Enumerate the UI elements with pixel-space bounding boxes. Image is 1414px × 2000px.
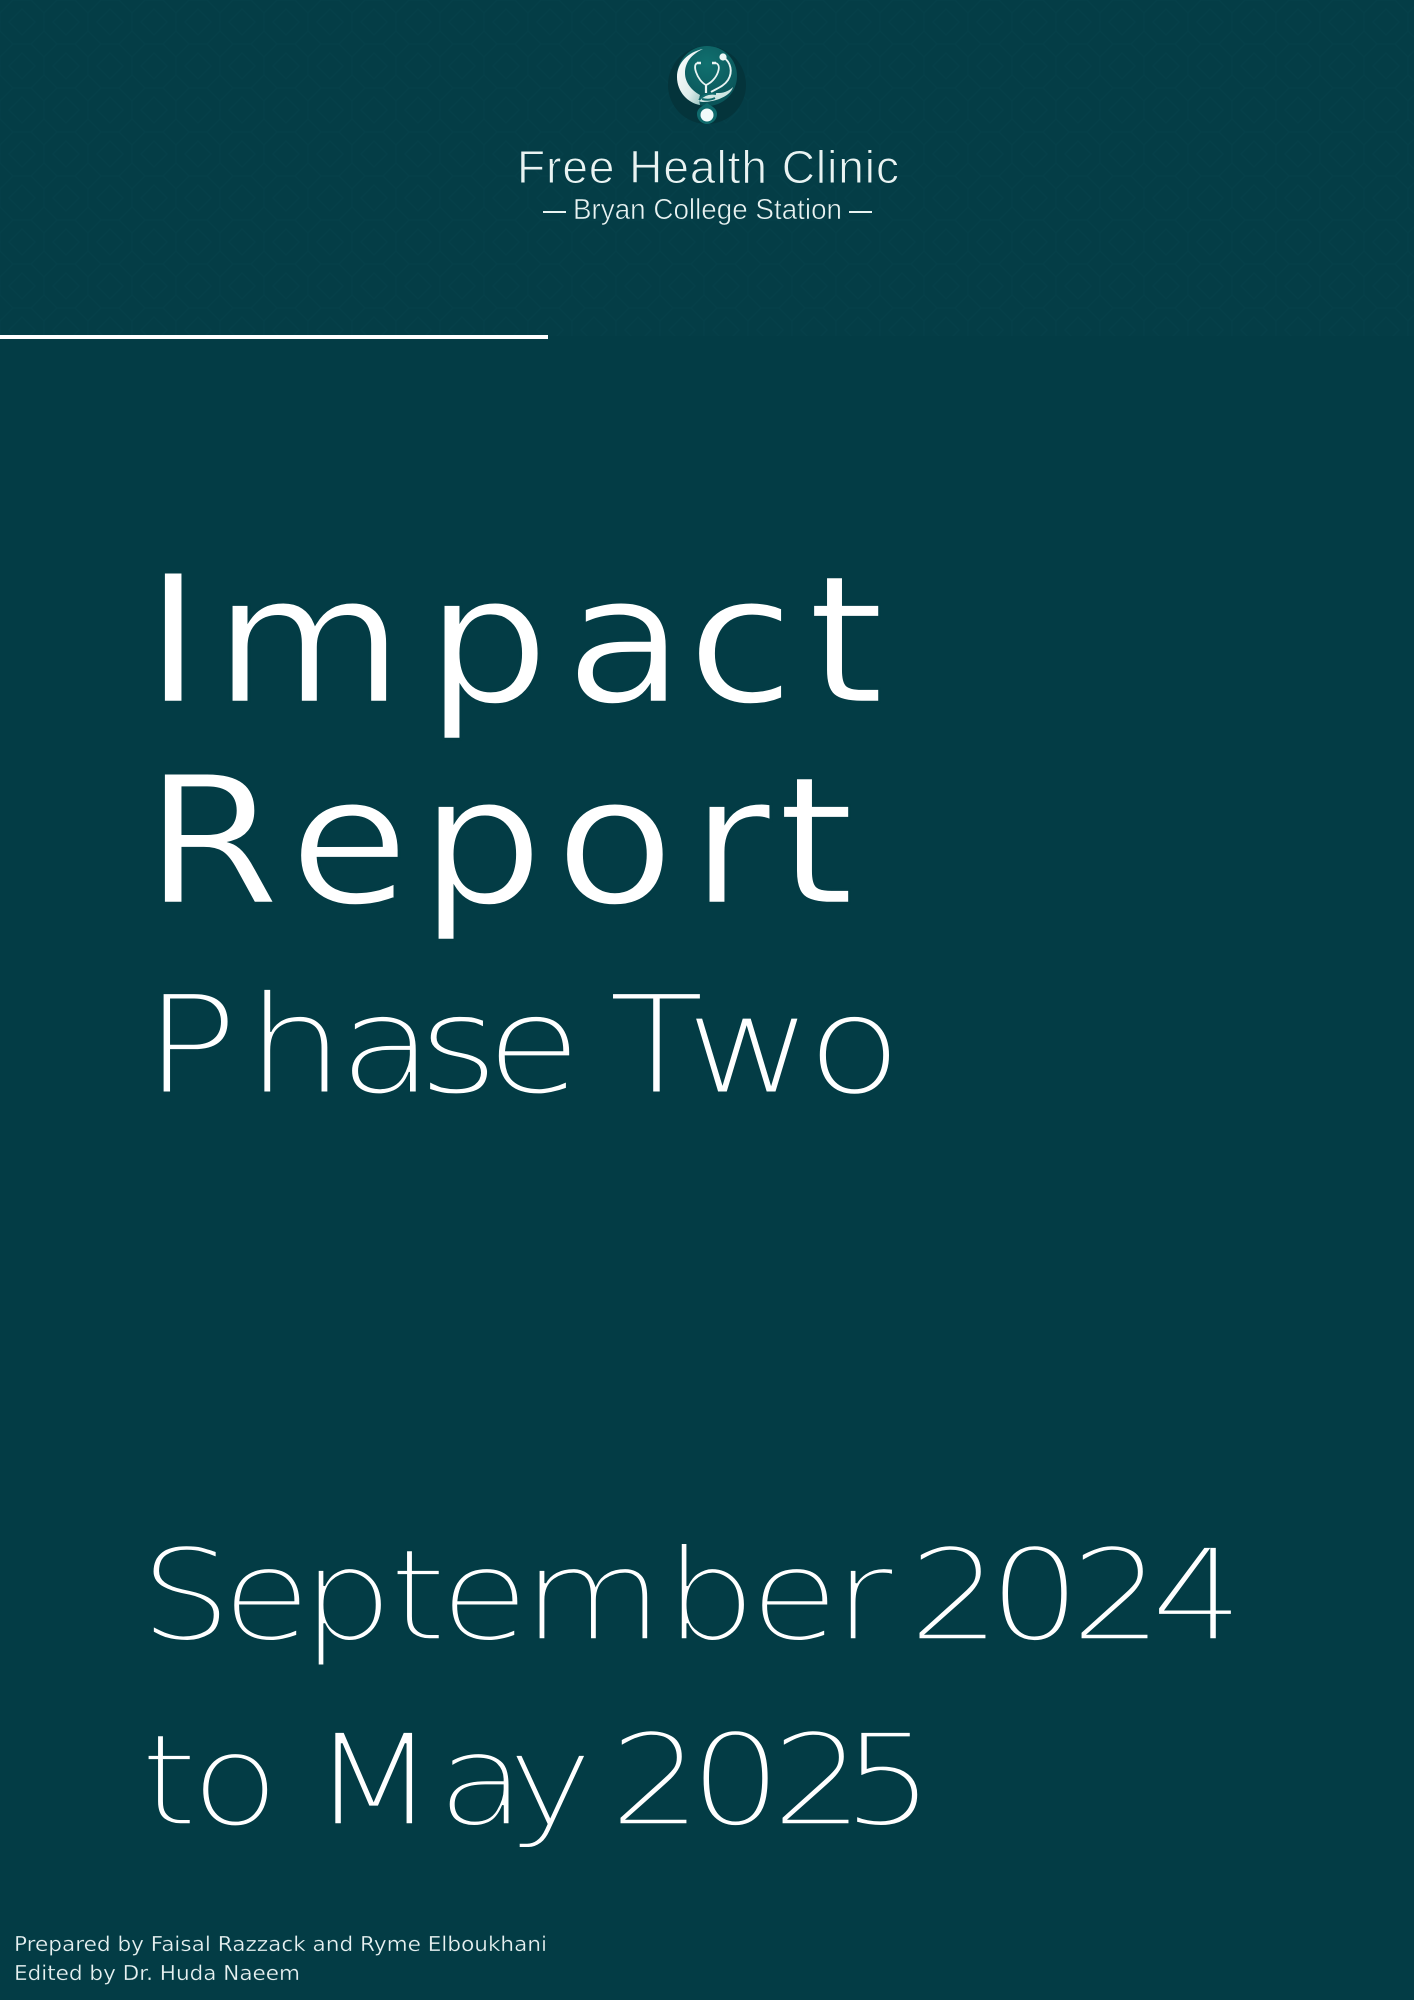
credits: Prepared by Faisal Razzack and Ryme Elboukhani: [14, 1932, 547, 1956]
icon: clinic logo emblem: [668, 46, 746, 124]
divider rule: [0, 335, 548, 339]
credits: [14, 1932, 547, 1985]
subtitle: Phase Two: Phase Two: [144, 968, 902, 1124]
logo wordmark: Bryan College Station: [573, 194, 842, 226]
logo wordmark: Free Health Clinic: [517, 141, 899, 193]
title: Impact Report: Impact: [144, 537, 884, 745]
credits: Edited by Dr. Huda Naeem: [14, 1961, 300, 1985]
title: Impact Report: Report: [144, 738, 854, 946]
date range: September 2024: [140, 1523, 1243, 1670]
date range: to May 2025: [141, 1708, 934, 1855]
date range: [140, 1523, 1243, 1855]
title: Impact Report: [144, 537, 884, 946]
logo wordmark: [517, 141, 899, 226]
